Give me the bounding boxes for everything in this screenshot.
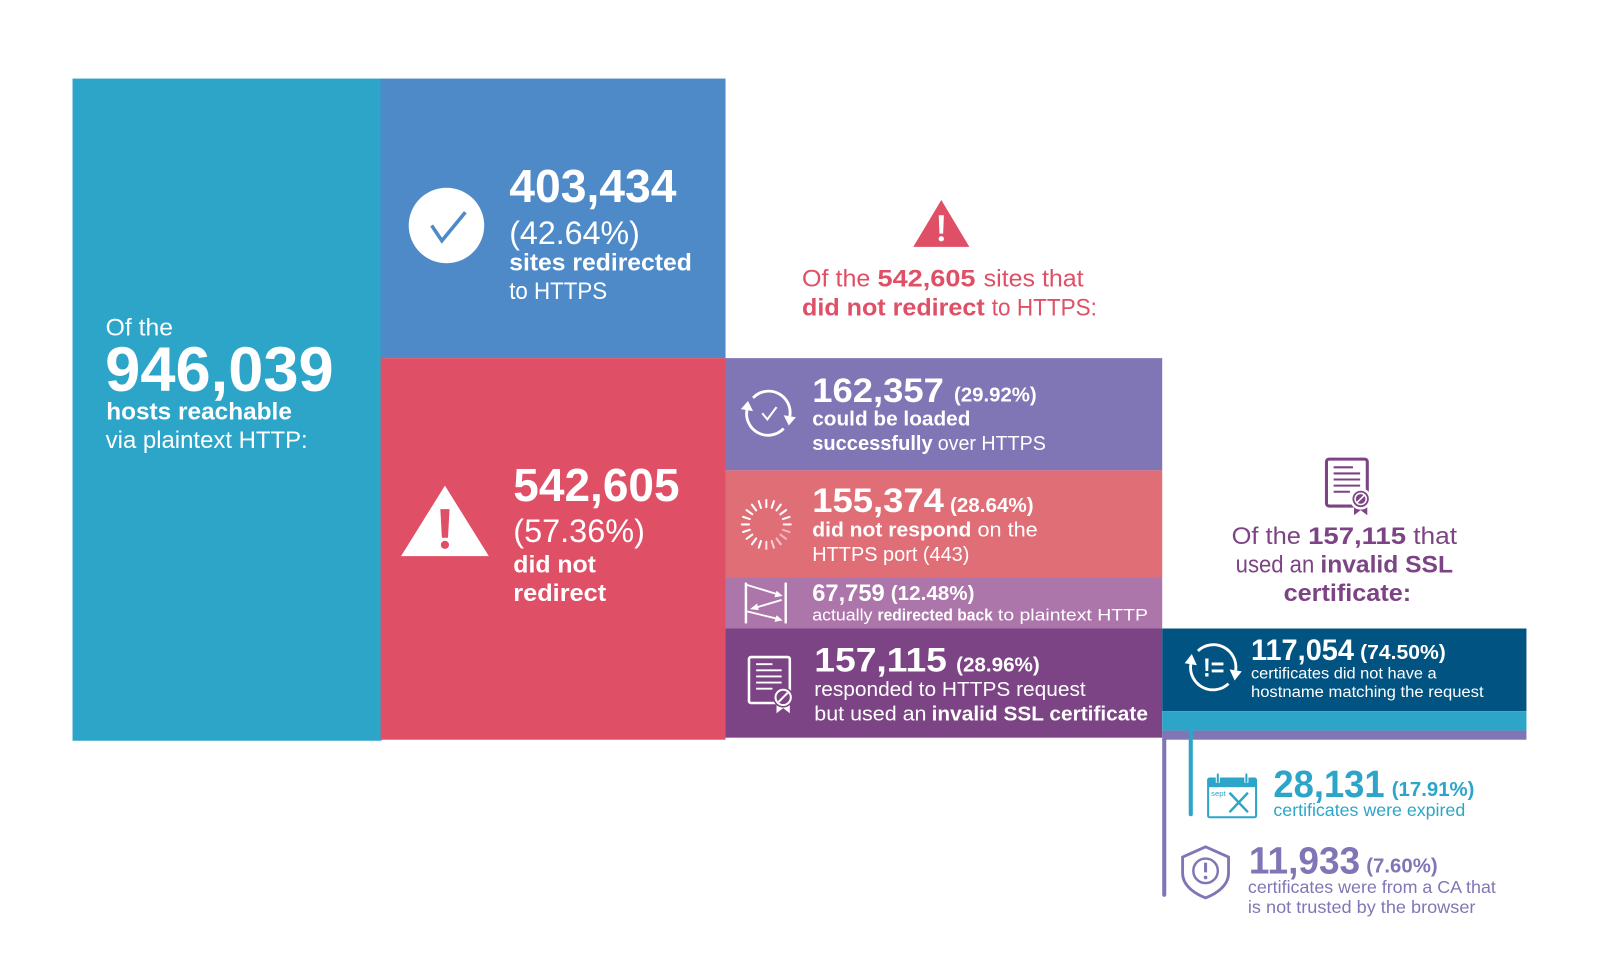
panel: 403,434 redirected to HTTPS: 403,434 xyxy=(509,160,677,212)
panel: 157,115 invalid SSL certificate: (28.96%) xyxy=(956,654,1040,676)
heading: sites that did not redirect: sites that xyxy=(984,266,1084,293)
heading: invalid SSL certificates: 157,115 xyxy=(1308,523,1406,550)
block: 11,933 untrusted CA: (7.60%) xyxy=(1366,855,1438,877)
block: 28,131 expired xyxy=(1208,763,1474,820)
heading: invalid SSL certificates: invalid SSL xyxy=(1320,551,1453,578)
panel: 117,054 hostname mismatch xyxy=(1162,629,1526,711)
connector: expired xyxy=(1189,731,1193,814)
icon: sync not-equal: != xyxy=(1203,654,1224,682)
connector: untrusted CA xyxy=(1162,740,1166,895)
panel: 403,434 redirected to HTTPS: to HTTPS xyxy=(509,278,607,305)
heading: invalid SSL certificates: that xyxy=(1413,523,1457,550)
panel: 67,759 redirected back: 67,759 xyxy=(812,580,885,607)
panel: 162,357 loaded over HTTPS: successfully xyxy=(812,433,933,455)
panel: 155,374 did not respond: (28.64%) xyxy=(950,495,1034,517)
bar: untrusted CA share xyxy=(1162,731,1526,740)
panel: 542,605 did not redirect: did not xyxy=(513,551,596,578)
panel: 946,039 hosts reachable: via plaintext HTTP: xyxy=(106,427,308,454)
panel: 117,054 hostname mismatch: 117,054 xyxy=(1251,634,1355,667)
panel: 946,039 hosts reachable: 946,039 xyxy=(105,335,334,405)
panel: 162,357 loaded over HTTPS xyxy=(726,358,1162,470)
block: 11,933 untrusted CA: is not trusted by the browser xyxy=(1248,897,1476,917)
block: 11,933 untrusted CA xyxy=(1183,839,1496,917)
block: 11,933 untrusted CA: certificates were from a CA that xyxy=(1248,877,1496,897)
block: 11,933 untrusted CA: 11,933 xyxy=(1249,839,1360,881)
panel: 542,605 did not redirect: 542,605 xyxy=(513,459,680,511)
panel: 157,115 invalid SSL certificate: responded to HTTPS request xyxy=(814,679,1086,701)
panel: 542,605 did not redirect: redirect xyxy=(513,580,606,607)
panel: 157,115 invalid SSL certificate: invalid SSL certificate xyxy=(932,703,1148,725)
panel: 157,115 invalid SSL certificate: but used an xyxy=(814,703,927,725)
heading: sites that did not redirect: to HTTPS: xyxy=(992,294,1097,321)
icon: warning triangle xyxy=(401,486,489,556)
heading: invalid SSL certificates: Of the xyxy=(1232,523,1301,550)
panel: 946,039 hosts reachable: Of the xyxy=(106,315,173,342)
panel: 67,759 redirected back: redirected back xyxy=(878,606,994,624)
panel: 542,605 did not redirect xyxy=(381,358,726,740)
panel: 155,374 did not respond: HTTPS port (443) xyxy=(812,544,969,566)
icon: calendar with cross xyxy=(1208,774,1256,817)
block: 28,131 expired: 28,131 xyxy=(1273,763,1385,805)
block: 28,131 expired: certificates were expired xyxy=(1273,800,1465,820)
icon: redirect loop arrows xyxy=(746,583,786,623)
panel: 162,357 loaded over HTTPS: (29.92%) xyxy=(954,384,1037,406)
icon: loading spinner xyxy=(742,500,791,549)
heading: invalid SSL certificates: used an xyxy=(1236,551,1314,578)
panel: 155,374 did not respond xyxy=(726,470,1162,577)
panel: 946,039 hosts reachable xyxy=(73,79,382,741)
icon: sync not-equal xyxy=(1185,645,1242,690)
panel: 403,434 redirected to HTTPS: sites redirected xyxy=(509,249,692,276)
panel: 117,054 hostname mismatch: (74.50%) xyxy=(1360,642,1446,664)
heading: sites that did not redirect: Of the xyxy=(802,266,870,293)
heading: sites that did not redirect: did not redirect xyxy=(802,294,985,321)
icon: calendar with cross: sept xyxy=(1211,789,1226,798)
panel: 155,374 did not respond: 155,374 xyxy=(812,482,945,520)
panel: 67,759 redirected back: actually xyxy=(812,605,873,624)
panel: 162,357 loaded over HTTPS: 162,357 xyxy=(812,372,944,410)
panel: 155,374 did not respond: on the xyxy=(978,520,1038,542)
panel: 157,115 invalid SSL certificate: 157,115 xyxy=(814,641,947,679)
panel: 67,759 redirected back: to plaintext HTTP xyxy=(998,605,1148,624)
heading: invalid SSL certificates xyxy=(1232,459,1457,607)
block: 28,131 expired: (17.91%) xyxy=(1392,779,1474,801)
panel: 403,434 redirected to HTTPS: (42.64%) xyxy=(509,214,640,251)
panel: 403,434 redirected to HTTPS xyxy=(381,79,726,358)
panel: 67,759 redirected back xyxy=(726,577,1162,629)
panel: 162,357 loaded over HTTPS: could be loaded xyxy=(812,408,970,430)
panel: 542,605 did not redirect: (57.36%) xyxy=(513,512,645,549)
panel: 117,054 hostname mismatch: certificates did not have a xyxy=(1251,665,1437,682)
icon: certificate purple xyxy=(1326,459,1371,515)
panel: 67,759 redirected back: (12.48%) xyxy=(891,583,974,605)
panel: 155,374 did not respond: did not respond xyxy=(812,520,971,542)
panel: 157,115 invalid SSL certificate xyxy=(726,629,1162,738)
icon: warning triangle red xyxy=(913,200,969,247)
bar: expired share xyxy=(1162,711,1526,731)
icon: sync check xyxy=(741,391,796,435)
panel: 946,039 hosts reachable: hosts reachable xyxy=(106,398,292,425)
icon: check mark circle xyxy=(409,188,484,263)
icon: shield warning xyxy=(1183,847,1229,898)
panel: 117,054 hostname mismatch: hostname matching the request xyxy=(1251,684,1484,701)
panel: 162,357 loaded over HTTPS: over HTTPS xyxy=(938,433,1046,455)
heading: sites that did not redirect xyxy=(802,200,1097,321)
heading: sites that did not redirect: 542,605 xyxy=(878,266,975,293)
icon: certificate with badge xyxy=(749,657,793,713)
heading: invalid SSL certificates: certificate: xyxy=(1284,580,1411,607)
